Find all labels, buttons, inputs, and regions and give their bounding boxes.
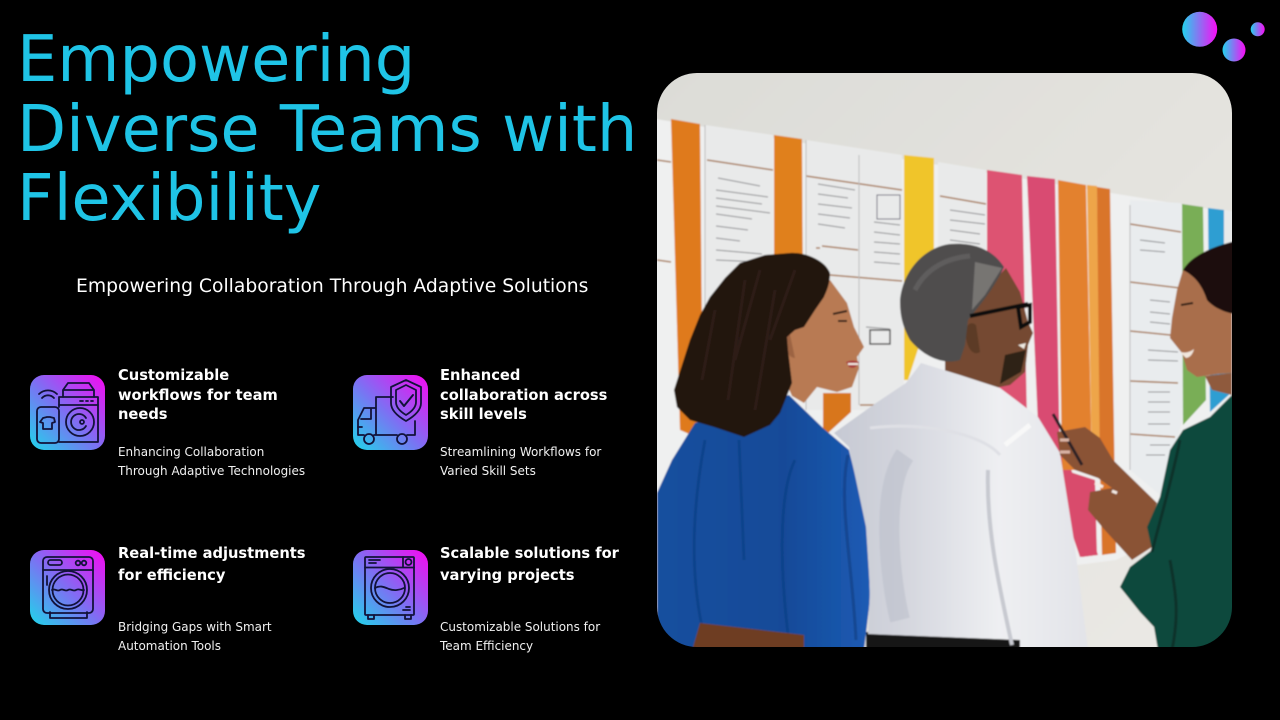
title: Flexibility: [17, 162, 321, 236]
chart lines: [657, 160, 1181, 437]
chart wall: [650, 118, 1240, 620]
heading: scalable solutions: [440, 545, 619, 584]
text: customizable workflows description: Enhancing Collaboration: [118, 445, 264, 459]
icon: washing machine with round door: [30, 550, 105, 625]
title: Diverse Teams with: [17, 92, 637, 166]
man in white shirt: head, glasses and shirt: [834, 244, 1088, 650]
subtitle: Empowering Collaboration Through Adaptive Solutions: [76, 276, 588, 297]
title: Empowering: [17, 23, 415, 97]
woman in green: hair, face, hands and top: [1053, 241, 1235, 650]
text: enhanced collaboration description: [440, 445, 602, 478]
heading: enhanced collaboration: [440, 367, 607, 423]
text: scalable solutions description: Customizable Solutions for: [440, 620, 600, 634]
text: real-time adjustments description: Bridging Gaps with Smart: [118, 620, 272, 634]
decorative gradient circles: [1182, 12, 1265, 62]
heading: customizable workflows: [118, 367, 278, 423]
heading: customizable workflows: Customizable: [118, 367, 229, 384]
heading: enhanced collaboration: Enhanced: [440, 367, 520, 384]
heading: real-time adjustments: [118, 545, 306, 584]
text: customizable workflows description: Through Adaptive Technologies: [118, 464, 305, 478]
text: real-time adjustments description: [118, 620, 272, 653]
photo: three colleagues at a wall of charts: [657, 73, 1232, 647]
icon: truck with shield: [353, 375, 428, 450]
heading: enhanced collaboration: collaboration across: [440, 387, 607, 404]
title: [17, 23, 637, 236]
text: enhanced collaboration description: Varied Skill Sets: [440, 464, 536, 478]
text: enhanced collaboration description: Streamlining Workflows for: [440, 445, 601, 459]
woman in blue: hair, face and blouse: [657, 253, 870, 650]
heading: real-time adjustments: Real-time adjustments: [118, 545, 306, 562]
icon: smart washer and phone: [30, 375, 105, 450]
heading: scalable solutions: Scalable solutions for: [440, 545, 619, 562]
heading: enhanced collaboration: skill levels: [440, 406, 527, 423]
icon: washing machine with dial: [353, 550, 428, 625]
text: scalable solutions description: [440, 620, 600, 653]
heading: real-time adjustments: for efficiency: [118, 567, 225, 584]
heading: customizable workflows: workflows for team: [118, 387, 278, 404]
text: real-time adjustments description: Automation Tools: [118, 639, 221, 653]
heading: customizable workflows: needs: [118, 406, 168, 423]
text: customizable workflows description: [118, 445, 305, 478]
text: scalable solutions description: Team Efficiency: [440, 639, 533, 653]
heading: scalable solutions: varying projects: [440, 567, 574, 584]
